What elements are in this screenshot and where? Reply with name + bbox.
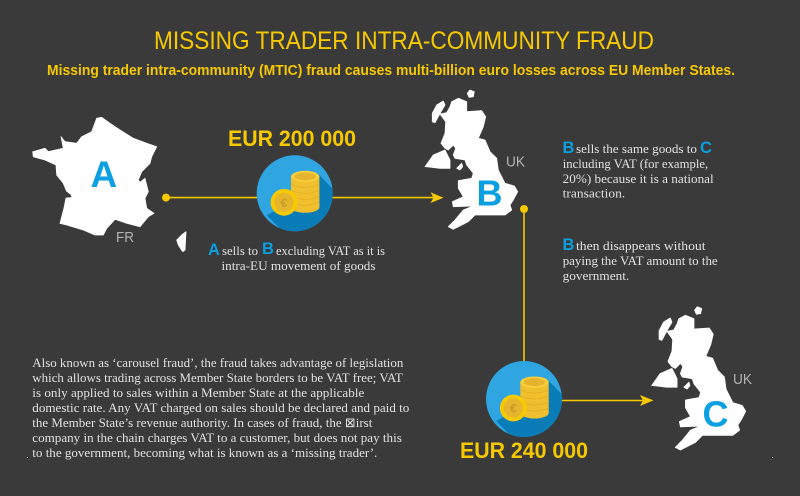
map: France with label A bbox=[33, 117, 186, 252]
title: MISSING TRADER INTRA-COMMUNITY FRAUD bbox=[154, 27, 654, 55]
text: B disappears bbox=[562, 236, 718, 283]
map: UK with label C bbox=[652, 307, 746, 450]
text: A sells to B: excluding VAT as it is bbox=[276, 243, 385, 258]
map: UK with label C: C bbox=[702, 394, 728, 435]
text: A sells to B: sells to bbox=[222, 243, 258, 258]
text: B sells to C: C bbox=[700, 139, 712, 157]
subtitle: Missing trader intra-community (MTIC) fraud causes multi-billion euro losses across EU Member States. bbox=[47, 63, 735, 79]
text: A sells to B: intra-EU movement of goods bbox=[222, 258, 376, 273]
map: France with label A: A bbox=[90, 154, 117, 195]
text block: carousel fraud explanation: domestic rate. Any VAT charged on sales should be declared and paid to bbox=[32, 400, 409, 415]
map: UK with label B bbox=[425, 90, 518, 229]
icon: euro coins 1 bbox=[256, 155, 333, 232]
text block: carousel fraud explanation bbox=[32, 355, 409, 460]
text block: carousel fraud explanation: company in the chain charges VAT to a customer, but does not pay this bbox=[32, 430, 402, 445]
text: A sells to B: A bbox=[208, 241, 220, 259]
arrow: A to B bbox=[162, 192, 444, 203]
text: B disappears: then disappears without bbox=[576, 238, 706, 253]
text: B disappears: government. bbox=[563, 268, 629, 283]
text: B sells to C: including VAT (for example, bbox=[563, 156, 708, 171]
country label: UK (B): UK bbox=[506, 154, 525, 171]
text: B sells to C: sells the same goods to bbox=[576, 141, 697, 156]
text block: carousel fraud explanation: the Member State’s revenue authority. In cases of fraud, the ⊠irst bbox=[32, 415, 373, 430]
text block: carousel fraud explanation: Also known as ‘carousel fraud’, the fraud takes advantage of legislation bbox=[32, 355, 404, 370]
map: UK with label B: B bbox=[476, 173, 502, 214]
text block: carousel fraud explanation: to the government, becoming what is known as a ‘missing trader’. bbox=[32, 445, 377, 460]
country label: FR: FR bbox=[116, 229, 134, 246]
icon: euro coins 2: € bbox=[510, 402, 517, 416]
text: B disappears: B bbox=[562, 236, 574, 254]
icon: euro coins 1: € bbox=[281, 196, 288, 210]
text: B sells to C: B bbox=[562, 139, 574, 157]
text: B sells to C: 20%) because it is a national bbox=[563, 171, 714, 186]
text: A sells to B bbox=[208, 240, 385, 273]
text block: carousel fraud explanation: is only applied to sales within a Member State at the applicable bbox=[32, 385, 365, 400]
text: B sells to C bbox=[562, 139, 714, 200]
text: A sells to B: B bbox=[262, 240, 274, 258]
amount: EUR 200 000: EUR 200 000 bbox=[228, 126, 356, 151]
text: B disappears: paying the VAT amount to the bbox=[563, 253, 718, 268]
icon: euro coins 2 bbox=[486, 361, 562, 437]
country label: UK (C): UK bbox=[733, 371, 752, 388]
text block: carousel fraud explanation: which allows trading across Member State borders to be VAT free; VAT bbox=[32, 370, 403, 385]
connector: B to C bbox=[520, 205, 654, 406]
text: B sells to C: transaction. bbox=[563, 186, 625, 200]
amount: EUR 240 000: EUR 240 000 bbox=[460, 438, 588, 463]
